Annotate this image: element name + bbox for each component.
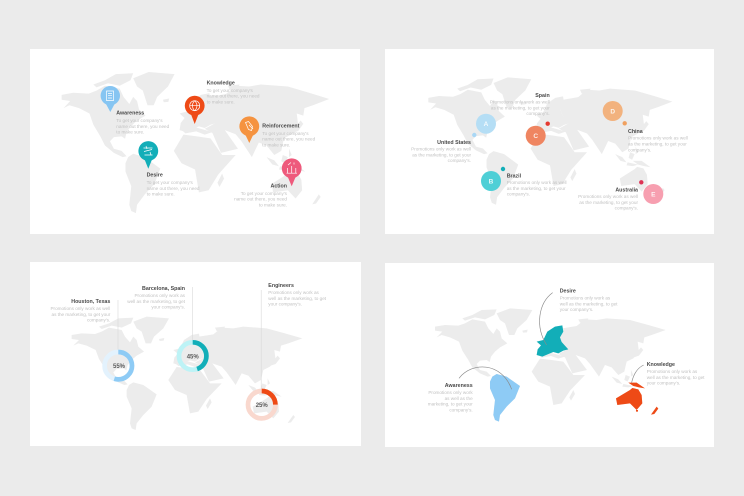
text: Awareness: to make sure.: [116, 130, 144, 135]
text: Action: Action: [271, 184, 287, 190]
text: Knowledge: Knowledge: [207, 80, 235, 86]
text: Barcelona, Spain: your company's.: [151, 305, 185, 310]
text: Awareness: [116, 110, 170, 135]
text: Action: to make sure.: [259, 202, 287, 207]
region: South America: [490, 374, 520, 422]
text: Spain: company's.: [526, 111, 550, 116]
text: Knowledge: [207, 80, 260, 104]
text: Houston, Texas: [50, 299, 111, 323]
text: Engineers: Engineers: [268, 283, 294, 289]
text: Desire: [147, 172, 200, 197]
text: Desire: [560, 288, 618, 312]
text: Australia: [578, 188, 638, 211]
text: Spain: Promotions only work as well: [490, 100, 550, 104]
circle E with dot: [639, 180, 663, 204]
pin: Reinforcement: [239, 116, 259, 143]
text: Barcelona, Spain: [127, 286, 186, 310]
text: China: as the marketing, to get your: [628, 142, 687, 146]
text: Houston, Texas: Houston, Texas: [71, 299, 110, 305]
donut: 55%: 55%: [113, 364, 126, 370]
text: Brazil: Promotions only work as well: [507, 180, 567, 185]
text: United States: as the marketing, to get your: [412, 152, 471, 157]
text: Knowledge: [647, 362, 705, 386]
text: Knowledge: Knowledge: [647, 362, 675, 368]
circle A with dot: A: [484, 121, 489, 128]
text: Awareness: Awareness: [445, 383, 473, 389]
text: Reinforcement: Reinforcement: [262, 124, 300, 130]
text: Awareness: company's.: [449, 407, 473, 412]
world map: [72, 317, 302, 430]
text: Action: [234, 184, 288, 207]
text: China: company's.: [628, 147, 651, 152]
world map: [435, 308, 666, 422]
text: Desire: name out there, you need: [147, 186, 200, 191]
text: Houston, Texas: company's.: [87, 318, 110, 323]
text: Australia: company's.: [615, 206, 638, 211]
circle E with dot: E: [651, 191, 656, 198]
text: Reinforcement: To get your company's: [262, 131, 309, 136]
world map: [428, 77, 672, 205]
circle C with dot: C: [533, 133, 538, 140]
text: Brazil: as the marketing, to get your: [507, 186, 566, 191]
pin: Knowledge: [185, 96, 205, 124]
circle B with dot: B: [489, 178, 494, 185]
donut: 55%: [105, 300, 132, 379]
text: Knowledge: name out there, you need: [207, 94, 260, 99]
circle B with dot: [481, 167, 505, 191]
text: Desire: To get your company's: [147, 180, 194, 185]
donut: 25%: [248, 290, 275, 418]
pin: Awareness: [101, 86, 120, 112]
text: Australia: as the marketing, to get your: [579, 200, 638, 205]
text: United States: United States: [437, 140, 471, 146]
pin: Action: [282, 158, 302, 186]
text: Spain: as the marketing, to get your: [491, 105, 550, 110]
text: Awareness: To get your company's: [116, 118, 163, 123]
text: Reinforcement: [262, 124, 316, 147]
pin: Desire: [138, 141, 158, 169]
text: Australia: Promotions only work as well: [578, 194, 638, 199]
text: Engineers: your company's.: [268, 302, 302, 307]
text: Houston, Texas: as the marketing, to get your: [51, 312, 111, 317]
text: Spain: [490, 93, 550, 116]
donut: 25%: 25%: [256, 403, 268, 409]
text: Knowledge: well as the marketing, to get: [647, 375, 705, 380]
text: Barcelona, Spain: well as the marketing, to get: [127, 299, 186, 304]
text: Action: To get your company's: [241, 191, 288, 196]
text: Houston, Texas: Promotions only work as well: [50, 306, 110, 311]
text: Awareness: marketing, to get your: [428, 402, 473, 407]
panel: lettered circles map: [385, 49, 714, 234]
circle D with dot: [603, 101, 627, 126]
text: Awareness: [428, 383, 473, 412]
text: Brazil: Brazil: [507, 174, 522, 180]
text: Knowledge: to make sure.: [207, 100, 235, 104]
panel: highlighted regions map: [385, 263, 714, 447]
text: Desire: your company's.: [560, 307, 593, 312]
text: Awareness: Awareness: [116, 110, 144, 116]
text: United States: Promotions only work as well: [411, 146, 471, 152]
region: Europe: [537, 325, 568, 357]
text: United States: company's.: [448, 158, 471, 163]
text: Desire: well as the marketing, to get: [560, 301, 618, 306]
donut: 45%: [179, 287, 206, 370]
region: Oceania: [616, 383, 658, 415]
text: Knowledge: your company's.: [647, 381, 680, 386]
text: Barcelona, Spain: Barcelona, Spain: [142, 286, 185, 292]
text: Action: name out there, you need: [234, 197, 287, 202]
text: Awareness: as well as the: [445, 396, 473, 401]
text: Engineers: Promotions only work as: [268, 290, 320, 295]
text: Awareness: name out there, you need: [116, 124, 170, 129]
text: Engineers: well as the marketing, to get: [268, 296, 327, 301]
circle C with dot: [526, 122, 550, 146]
curved leader lines: [459, 293, 644, 389]
text: Brazil: company's.: [507, 192, 530, 197]
panel: donut charts map: [30, 262, 361, 446]
text: Reinforcement: name out there, you need: [262, 137, 316, 142]
panel: pin markers map: [30, 49, 360, 234]
text: China: Promotions only work as well: [628, 136, 688, 141]
text: United States: [411, 140, 471, 163]
text: Desire: Promotions only work as: [560, 296, 611, 300]
world map: [62, 72, 329, 213]
text: Brazil: [507, 174, 567, 197]
text: Knowledge: Promotions only work as: [647, 369, 698, 374]
text: Spain: Spain: [535, 93, 550, 99]
text: China: [628, 129, 688, 152]
text: Desire: Desire: [560, 288, 576, 294]
text: Engineers: [268, 283, 327, 307]
text: Knowledge: To get your company's: [207, 88, 254, 93]
text: Desire: Desire: [147, 172, 163, 178]
text: Barcelona, Spain: Promotions only work as: [134, 293, 186, 298]
text: Awareness: Promotions only work: [428, 390, 473, 395]
circle A with dot: [472, 114, 496, 137]
text: Reinforcement: to make sure.: [262, 142, 290, 147]
text: Desire: to make sure.: [147, 192, 175, 197]
donut: 45%: 45%: [187, 354, 199, 360]
circle D with dot: D: [610, 108, 615, 115]
text: Australia: Australia: [615, 188, 638, 194]
text: China: China: [628, 129, 643, 135]
